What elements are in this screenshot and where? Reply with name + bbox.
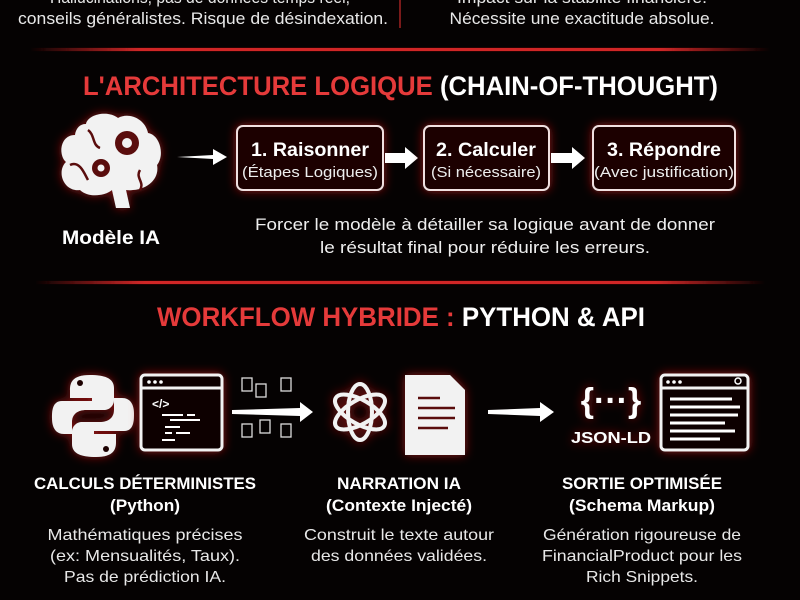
column text: python: (Python) (110, 496, 180, 515)
arrow: 1 to 2 (385, 147, 418, 169)
arrow: 2 to 3 (551, 147, 585, 169)
arrow: python to AI (232, 402, 313, 422)
icon: small documents (242, 378, 291, 437)
text block: explanation: Forcer le modèle à détailler sa logique avant de donner (255, 215, 715, 234)
column text: python: (ex: Mensualités, Taux). (50, 548, 240, 565)
text block: explanation (255, 215, 715, 257)
column text: output: (Schema Markup) (569, 496, 715, 515)
icon: browser window (661, 375, 748, 450)
step box 1 (237, 126, 383, 190)
column text: python (34, 474, 256, 586)
icon: brain with gears (61, 114, 161, 208)
column text: python: Pas de prédiction IA. (64, 569, 226, 586)
arrow: AI to output (488, 402, 554, 422)
column text: narration: des données validées. (311, 548, 487, 565)
step box 2: 2. Calculer (436, 140, 537, 161)
column text: output: FinancialProduct pour les (542, 548, 742, 565)
icon: json-ld braces (571, 382, 651, 447)
icon: code window (141, 375, 222, 450)
heading: architecture logique: L'ARCHITECTURE LOGIQUE (CHAIN-OF-THOUGHT) (83, 71, 718, 101)
label: Modèle IA: Modèle IA (62, 228, 160, 249)
icon: openai logo (330, 384, 390, 440)
step box 3 (593, 126, 735, 190)
column text: narration (304, 474, 495, 565)
icon: document (405, 375, 465, 455)
step box 3: (Avec justification) (594, 164, 734, 181)
text block: explanation: le résultat final pour réduire les erreurs. (320, 238, 650, 257)
step box 2: (Si nécessaire) (431, 164, 541, 181)
text block: top left cut off: conseils généralistes. Risque de désindexation. (18, 9, 388, 28)
column text: narration: Construit le texte autour (304, 527, 495, 544)
step box 2 (424, 126, 549, 190)
column text: narration: (Contexte Injecté) (326, 496, 472, 515)
icon: json-ld braces: {···} (581, 382, 641, 420)
heading: workflow hybride: WORKFLOW HYBRIDE : PYTHON & API (157, 302, 645, 332)
column text: narration: NARRATION IA (337, 474, 461, 493)
column text: output: SORTIE OPTIMISÉE (562, 474, 722, 493)
icon: json-ld braces: JSON-LD (571, 430, 651, 447)
column text: output: Rich Snippets. (586, 569, 698, 586)
column text: output (542, 474, 742, 586)
step box 3: 3. Répondre (607, 140, 721, 161)
step box 1: 1. Raisonner (251, 140, 370, 161)
text block: top left cut off (18, 0, 388, 28)
text block: top right cut off (450, 0, 714, 28)
column text: python: Mathématiques précises (48, 527, 242, 544)
column text: python: CALCULS DÉTERMINISTES (34, 474, 256, 493)
text block: top right cut off: Nécessite une exactitude absolue. (450, 9, 714, 28)
column text: output: Génération rigoureuse de (543, 527, 741, 544)
icon: code window: </> (152, 397, 169, 411)
arrow: brain to step 1 (177, 149, 227, 165)
step box 1: (Étapes Logiques) (242, 164, 378, 181)
icon: python logo (52, 375, 134, 457)
